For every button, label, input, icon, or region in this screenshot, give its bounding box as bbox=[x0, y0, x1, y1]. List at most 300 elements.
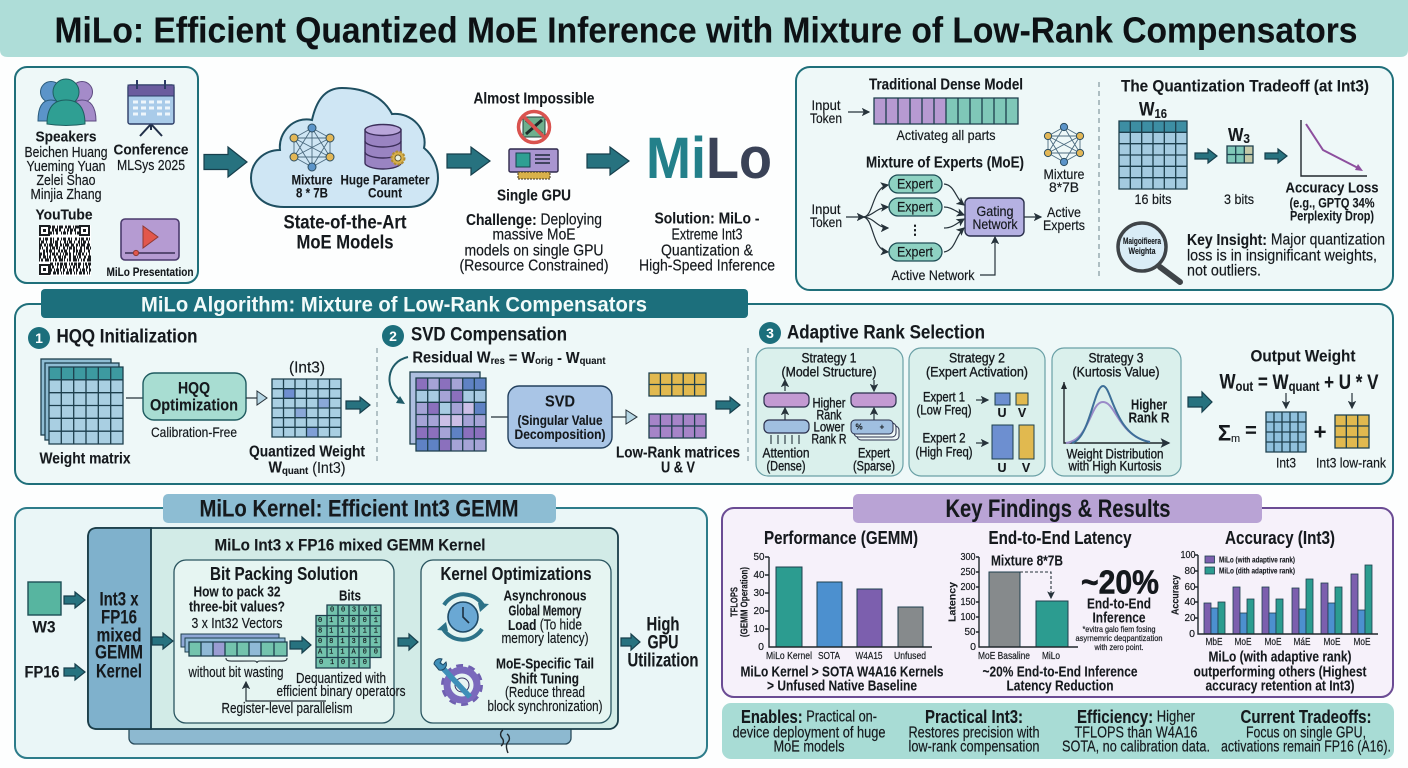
arrow bbox=[1024, 216, 1041, 218]
chart: performance: 0 bbox=[758, 641, 764, 653]
arrow bbox=[587, 147, 629, 175]
box: mixed GEMM kernel bbox=[88, 528, 618, 729]
label: quantized weight: W bbox=[268, 460, 283, 476]
formula: sum: = bbox=[1245, 420, 1257, 442]
text: cloud labels: Mixture bbox=[292, 172, 333, 188]
label: high GPU utilization: Utilization bbox=[628, 650, 698, 672]
grid: U bbox=[649, 373, 706, 396]
text: speakers: Speakers bbox=[36, 128, 96, 146]
arrow bbox=[398, 634, 418, 650]
takeaway: efficiency: SOTA, no calibration data. bbox=[1062, 738, 1210, 756]
input: W3 bbox=[28, 582, 61, 636]
formula: residual: Residual W bbox=[412, 350, 499, 366]
bit grid: A 1 1 A 0 0 bbox=[318, 648, 378, 656]
grid: low-rank bbox=[1335, 415, 1369, 448]
text: key insight: not outliers. bbox=[1187, 262, 1261, 280]
formula: sum: m bbox=[1231, 433, 1240, 445]
chart: latency: Mixture 8*7B bbox=[991, 552, 1063, 570]
takeaway: efficiency bbox=[1062, 707, 1210, 756]
card: strategy 1: % bbox=[855, 422, 863, 432]
gating network bbox=[965, 198, 1024, 236]
card: strategy 1: Rank R bbox=[812, 432, 847, 446]
box: kernel optimizations: Asynchronous bbox=[504, 588, 586, 604]
panel: takeaways bbox=[722, 703, 1394, 759]
chart: accuracy bbox=[1170, 528, 1378, 694]
formula: residual: res bbox=[491, 355, 505, 367]
chart: latency: *evitra galo fiem fosing bbox=[1082, 624, 1156, 634]
label: W3: 3 bbox=[1243, 130, 1250, 146]
chart: accuracy: MoE bbox=[1324, 636, 1340, 648]
takeaway: practical int3: Practical Int3: bbox=[925, 707, 1023, 727]
card: strategy 1: + bbox=[880, 422, 885, 432]
chart: latency: ~20% End-to-End Inference bbox=[982, 664, 1138, 680]
expert nodes bbox=[889, 175, 942, 261]
arrow bbox=[152, 633, 173, 649]
box: bit packing: How to pack 32 bbox=[194, 584, 280, 600]
title bbox=[0, 0, 1408, 57]
text: speakers: Beichen Huang bbox=[24, 145, 108, 161]
label: input token: Token bbox=[810, 214, 842, 230]
grid stack: weight matrix bbox=[41, 359, 123, 444]
card: strategy 2: V bbox=[1018, 406, 1027, 420]
card: strategy 1: Expert bbox=[858, 446, 890, 460]
label: input token bbox=[810, 97, 842, 126]
takeaway: tradeoffs bbox=[1221, 707, 1391, 756]
label: mixture bbox=[1044, 166, 1085, 195]
text: state of the art: State-of-the-Art bbox=[284, 212, 407, 234]
card: strategy 2: U bbox=[997, 461, 1007, 475]
expert nodes: Expert bbox=[897, 176, 933, 192]
chart: accuracy: 40 bbox=[1184, 596, 1196, 608]
icon: mixture network bbox=[1044, 123, 1084, 166]
text: speakers: Zelei Shao bbox=[36, 173, 96, 189]
bit grid: 0 8 1 3 8 1 bbox=[318, 638, 378, 646]
chart: performance: MiLo Kernel bbox=[766, 650, 812, 662]
label: low-rank matrices bbox=[616, 444, 740, 476]
takeaway: efficiency: TFLOPS than W4A16 bbox=[1074, 724, 1198, 742]
formula: residual: orig bbox=[535, 355, 553, 367]
text: key insight: Key Insight: Major quantization bbox=[1187, 232, 1385, 248]
text: state of the art: MoE Models bbox=[296, 232, 394, 254]
text: cloud labels bbox=[292, 172, 430, 200]
label: input token: Input bbox=[812, 201, 841, 217]
step 1 heading: 1 bbox=[35, 330, 43, 346]
card: strategy 2: (High Freq) bbox=[916, 444, 972, 460]
chart: accuracy: MáE bbox=[1294, 636, 1310, 648]
box: HQQ optimization: Optimization bbox=[150, 396, 238, 414]
chart: latency: MoE Basaline bbox=[978, 650, 1030, 662]
label: mixture: 8*7B bbox=[1049, 179, 1079, 195]
label: high GPU utilization: GPU bbox=[648, 632, 678, 654]
takeaway: efficiency: Efficiency: Higher bbox=[1077, 707, 1195, 727]
chart: accuracy: Accuracy (Int3) bbox=[1225, 528, 1335, 548]
label: 3 bits: 3 bits bbox=[1224, 191, 1254, 207]
chart: performance: 40 bbox=[754, 569, 765, 581]
label: quantized weight bbox=[249, 444, 365, 477]
box: kernel optimizations: Global Memory bbox=[508, 602, 582, 620]
text: state of the art bbox=[284, 212, 407, 254]
heading bar: algorithm bbox=[41, 289, 748, 318]
label: active experts: Active bbox=[1047, 204, 1081, 220]
text: challenge: Challenge: Deploying bbox=[466, 212, 602, 228]
chart: latency: 250 bbox=[960, 566, 976, 578]
bit grid: 0 1 3 0 0 1 bbox=[318, 617, 378, 625]
dense bar bbox=[874, 98, 1018, 124]
box: bit packing: Register-level parallelism bbox=[222, 701, 352, 717]
text: key insight: loss is in insignificant weights, bbox=[1187, 248, 1377, 264]
label: accuracy loss: Perplexity Drop) bbox=[1290, 208, 1374, 224]
arrow bbox=[64, 592, 85, 608]
formula: sum bbox=[1218, 420, 1257, 446]
icon: gear and wrench bbox=[434, 659, 479, 702]
bit grid: 0 0 3 0 1 bbox=[330, 606, 378, 614]
label: active experts: Experts bbox=[1043, 217, 1085, 233]
box: HQQ optimization: HQQ bbox=[178, 378, 210, 398]
card: strategy 1 bbox=[756, 348, 903, 476]
heading: traditional dense model: Traditional Dense Model bbox=[869, 76, 1023, 94]
grid: quantized weight bbox=[272, 379, 341, 437]
heading bar: algorithm: MiLo Algorithm: Mixture of Low-Rank Compensators bbox=[141, 294, 647, 316]
label: accuracy loss bbox=[1286, 180, 1378, 224]
card: strategy 2: (Low Freq) bbox=[916, 402, 972, 418]
chart: accuracy: MoE bbox=[1234, 636, 1252, 648]
takeaway: practical int3: Restores precision with bbox=[908, 724, 1040, 742]
chart: accuracy: 80 bbox=[1184, 565, 1196, 577]
chart: performance: Performance (GEMM) bbox=[764, 528, 918, 548]
panel: speakers and conference bbox=[15, 67, 198, 283]
card: strategy 1: Attention bbox=[762, 446, 810, 460]
text: challenge: (Resource Constrained) bbox=[460, 258, 608, 274]
label: high GPU utilization: High bbox=[646, 614, 680, 636]
card: strategy 2: Strategy 2 bbox=[949, 350, 1005, 366]
card: strategy 1: Strategy 1 bbox=[802, 350, 856, 366]
chart: performance: 30 bbox=[754, 587, 765, 599]
card: strategy 1: Higher bbox=[812, 396, 846, 410]
chart: latency: 200 bbox=[960, 581, 976, 593]
formula: output weight: W bbox=[1220, 370, 1239, 394]
box: kernel optimizations: Shift Tuning bbox=[511, 670, 579, 688]
expert nodes: ⋮ bbox=[908, 222, 922, 238]
arrows: token to experts bbox=[846, 185, 888, 252]
text: solution: Quantization & bbox=[661, 242, 754, 260]
heading bar: key findings: Key Findings & Results bbox=[946, 495, 1170, 523]
arrow bbox=[621, 634, 640, 650]
arrow bbox=[1195, 149, 1217, 163]
formula: residual: = W bbox=[505, 350, 536, 366]
chart: accuracy: outperforming others (Highest bbox=[1194, 664, 1366, 680]
chart: accuracy: 0 bbox=[1189, 628, 1195, 640]
text: conference: Conference bbox=[114, 142, 188, 158]
box: kernel optimizations: MoE-Specific Tail bbox=[496, 656, 594, 672]
label: int3: (Int3) bbox=[289, 360, 325, 376]
takeaway: enables bbox=[732, 707, 886, 756]
text: solution: High-Speed Inference bbox=[639, 258, 775, 274]
label: 16 bits: 16 bits bbox=[1134, 191, 1172, 207]
arrow bbox=[346, 397, 370, 413]
box: bit packing: three-bit values? bbox=[189, 598, 285, 616]
panel: key findings bbox=[722, 494, 1393, 697]
label: activate all parts: Activateg all parts bbox=[896, 127, 996, 143]
text: cloud labels: 8 * 7B bbox=[296, 186, 328, 200]
arrow bbox=[204, 147, 247, 177]
card: strategy 2: Expert 2 bbox=[922, 430, 966, 446]
label: kernel side bbox=[95, 590, 143, 682]
heading: mixture of experts: Mixture of Experts (MoE) bbox=[866, 154, 1024, 172]
card: strategy 2: U bbox=[997, 406, 1007, 420]
chart: accuracy: accuracy retention at Int3) bbox=[1206, 678, 1354, 694]
arrow bbox=[716, 397, 740, 413]
text: challenge: massive MoE bbox=[492, 226, 576, 244]
card: strategy 2: (Expert Activation) bbox=[926, 364, 1028, 380]
label: accuracy loss: Accuracy Loss bbox=[1286, 180, 1378, 196]
text: challenge: models on single GPU bbox=[464, 242, 604, 260]
arrow bbox=[1265, 149, 1287, 163]
label: W16: 16 bbox=[1154, 106, 1167, 120]
icon: GPU bbox=[509, 149, 558, 179]
label: kernel side: Int3 x bbox=[100, 590, 139, 610]
chart: latency: 0 bbox=[970, 641, 976, 653]
bit grid bbox=[316, 605, 381, 668]
box: bit packing: efficient binary operators bbox=[276, 684, 406, 700]
label: int3 grids: Int3 low-rank bbox=[1316, 456, 1386, 470]
logo: MiLo: MiLo bbox=[646, 126, 772, 190]
grid: W16 bbox=[1119, 121, 1187, 189]
chart: latency: End-to-End bbox=[1087, 596, 1151, 612]
step 3 heading: Adaptive Rank Selection bbox=[787, 322, 985, 344]
chart: accuracy loss bbox=[1301, 120, 1367, 176]
step 3 heading: 3 bbox=[766, 325, 774, 341]
formula: residual: quant bbox=[580, 355, 606, 367]
text: single GPU: Single GPU bbox=[497, 188, 571, 204]
panel: MiLo algorithm bbox=[15, 289, 1393, 484]
label: low-rank matrices: U & V bbox=[661, 460, 696, 476]
card: strategy 3 bbox=[1052, 348, 1181, 476]
text: solution bbox=[639, 210, 775, 274]
chart: latency: Latency Reduction bbox=[1006, 678, 1114, 694]
box: kernel optimizations: memory latency) bbox=[502, 631, 588, 647]
label: input token: Input bbox=[812, 97, 841, 113]
text: cloud labels: Huge Parameter bbox=[340, 172, 430, 188]
chart: latency: MiLo bbox=[1042, 650, 1060, 662]
vectors bbox=[181, 634, 287, 663]
formula: output weight: out bbox=[1236, 378, 1253, 394]
label: accuracy loss: (e.g., GPTQ 34% bbox=[1290, 196, 1374, 210]
chart: accuracy: 60 bbox=[1184, 581, 1196, 593]
box: bit packing: Bits bbox=[339, 588, 361, 604]
formula: output weight: = W bbox=[1253, 370, 1289, 394]
icon: conference calendar bbox=[128, 80, 174, 136]
icon: database with gear bbox=[365, 124, 404, 169]
formula: output weight: + U * V bbox=[1319, 370, 1378, 394]
chart: accuracy: MbE bbox=[1206, 636, 1222, 648]
box: kernel optimizations: (Reduce thread bbox=[505, 685, 585, 701]
legend: accuracy bbox=[1205, 554, 1295, 576]
chart: accuracy: 100 bbox=[1180, 549, 1196, 561]
heading bar: key findings bbox=[853, 494, 1262, 523]
card: strategy 3: Strategy 3 bbox=[1088, 350, 1144, 366]
icon: people bbox=[38, 79, 96, 126]
formula: residual: - W bbox=[553, 350, 580, 366]
label: W3: W bbox=[1228, 125, 1245, 145]
label: input token bbox=[810, 201, 842, 230]
chart: latency: with zero point. bbox=[1094, 642, 1144, 652]
text: speakers: Minjia Zhang bbox=[30, 187, 102, 203]
chart: performance: 50 bbox=[754, 551, 765, 563]
box: bit packing: Bit Packing Solution bbox=[210, 564, 358, 584]
label: quantized weight: (Int3) bbox=[308, 460, 346, 476]
text: solution: Extreme Int3 bbox=[672, 226, 742, 244]
label: W16: W bbox=[1139, 100, 1157, 120]
symbol: plus: + bbox=[1314, 420, 1326, 444]
card: strategy 3: Weight Distribution bbox=[1066, 446, 1164, 462]
chart: accuracy: Accuracy bbox=[1170, 575, 1182, 615]
legend: accuracy: MiLo (dith adaptive rank) bbox=[1219, 566, 1295, 576]
label: kernel side: mixed bbox=[96, 626, 142, 646]
card: strategy 1: (Dense) bbox=[766, 458, 806, 474]
icon: magnifier: Maigoifieera bbox=[1123, 236, 1162, 246]
arrows: experts to gating bbox=[944, 184, 964, 252]
text: challenge bbox=[460, 212, 608, 274]
box: bit packing: without bit wasting bbox=[188, 665, 284, 681]
arrow bbox=[848, 111, 869, 113]
box: kernel optimizations: Kernel Optimizations bbox=[440, 564, 592, 584]
box: SVD bbox=[508, 386, 612, 448]
chart: performance: TFLOPS bbox=[730, 587, 740, 617]
card: strategy 3: Rank R bbox=[1128, 410, 1170, 426]
box: bit packing: Dequantized with bbox=[296, 671, 386, 687]
chart: performance bbox=[730, 528, 944, 694]
heading bar: kernel: MiLo Kernel: Efficient Int3 GEMM bbox=[200, 496, 518, 522]
box: kernel optimizations bbox=[421, 560, 611, 723]
icon: MoE cloud bbox=[251, 88, 438, 207]
label: kernel side: Kernel bbox=[96, 662, 142, 682]
input: FP16: FP16 bbox=[24, 662, 60, 682]
chart: latency: 300 bbox=[960, 551, 976, 563]
box: SVD: SVD bbox=[545, 394, 575, 410]
panel: MiLo kernel bbox=[15, 494, 707, 758]
takeaway: enables: Enables: Practical on- bbox=[741, 707, 877, 727]
expert nodes: Expert bbox=[897, 200, 933, 214]
card: strategy 3: Higher bbox=[1131, 396, 1167, 414]
gating network: Network bbox=[972, 216, 1018, 232]
takeaway: practical int3 bbox=[908, 707, 1040, 756]
label: high GPU utilization bbox=[628, 614, 698, 672]
grid: int3 bbox=[1266, 412, 1306, 452]
chart: accuracy: MoE bbox=[1354, 636, 1370, 648]
takeaway: tradeoffs: Current Tradeoffs: bbox=[1240, 707, 1372, 727]
text: almost impossible: Almost Impossible bbox=[474, 90, 595, 108]
text: key insight bbox=[1187, 232, 1385, 280]
box: kernel optimizations: block synchronization) bbox=[488, 699, 602, 715]
card: strategy 3: with High Kurtosis bbox=[1068, 458, 1162, 474]
icon: prohibited bbox=[518, 112, 550, 142]
chart: latency: ~20% bbox=[1081, 564, 1159, 600]
label: kernel side: GEMM bbox=[95, 642, 143, 664]
chart: performance: > Unfused Native Baseline bbox=[767, 678, 917, 694]
box: SVD: (Singular Value bbox=[518, 412, 603, 428]
label: calibration-free: Calibration-Free bbox=[151, 424, 237, 440]
connector bbox=[491, 416, 508, 418]
text: presentation label: MiLo Presentation bbox=[106, 265, 194, 279]
chart: performance: Unfused bbox=[894, 650, 926, 662]
label: active experts bbox=[1043, 204, 1085, 233]
arrows: down to grids bbox=[1286, 393, 1352, 408]
text: youtube: YouTube bbox=[36, 206, 92, 224]
chart: latency: 50 bbox=[964, 626, 976, 638]
heading: quantization tradeoff: The Quantization Tradeoff (at Int3) bbox=[1121, 76, 1369, 96]
icon: video player bbox=[121, 219, 179, 260]
gating network: Gating bbox=[976, 203, 1014, 219]
formula: output weight: quant bbox=[1289, 378, 1320, 394]
arrow bbox=[980, 237, 995, 275]
chart: latency: 100 bbox=[960, 611, 976, 623]
heading: kernel: MiLo Int3 x FP16 mixed GEMM Kernel bbox=[214, 536, 486, 554]
arrow bbox=[64, 664, 85, 680]
takeaway: enables: device deployment of huge bbox=[732, 724, 886, 742]
bars: accuracy bbox=[1204, 565, 1372, 634]
box: SVD: Decomposition) bbox=[514, 426, 606, 442]
box: kernel optimizations: Load (To hide bbox=[508, 616, 582, 634]
icon: bottom connector bbox=[501, 730, 509, 753]
chart: latency: Inference bbox=[1092, 610, 1146, 626]
label: low-rank matrices: Low-Rank matrices bbox=[616, 444, 740, 462]
text: cloud labels: Count bbox=[368, 186, 402, 200]
step 2 heading: SVD Compensation bbox=[411, 324, 567, 346]
label: quantized weight: quant bbox=[282, 465, 309, 477]
chart: performance: W4A15 bbox=[856, 650, 883, 662]
chart: accuracy: MoE bbox=[1264, 636, 1282, 648]
formula: sum: Σ bbox=[1218, 420, 1231, 446]
base bar bbox=[129, 722, 571, 744]
chart: accuracy: MiLo (with adaptive rank) bbox=[1208, 648, 1352, 666]
heading: output weight: Output Weight bbox=[1250, 346, 1356, 366]
box: bit packing: 3 x Int32 Vectors bbox=[192, 616, 282, 632]
box: HQQ optimization bbox=[143, 373, 246, 420]
card: strategy 2 bbox=[909, 348, 1045, 476]
grid: W3 bbox=[1227, 146, 1253, 163]
arrow bbox=[612, 410, 637, 424]
text: speakers bbox=[24, 128, 108, 203]
card: strategy 1: (Sparse) bbox=[853, 458, 895, 474]
chart: performance: SOTA bbox=[818, 650, 840, 662]
takeaway: enables: MoE models bbox=[774, 738, 845, 756]
label: int3 grids: Int3 bbox=[1276, 456, 1296, 470]
panel: models and quantization tradeoff bbox=[796, 67, 1393, 290]
icon: network bbox=[290, 124, 334, 171]
chart: latency bbox=[948, 528, 1163, 694]
icon: magnifier: Weighta bbox=[1128, 246, 1156, 256]
icon: magnifier bbox=[1118, 223, 1180, 282]
chart: performance: MiLo Kernel > SOTA W4A16 Kernels bbox=[740, 664, 944, 680]
connector bbox=[126, 397, 143, 399]
step 2 heading: 2 bbox=[389, 328, 397, 344]
icon: clock bbox=[437, 594, 489, 640]
chart: performance: 20 bbox=[754, 605, 765, 617]
chart: accuracy: 20 bbox=[1184, 612, 1196, 624]
expert nodes: Expert bbox=[897, 244, 933, 260]
text: conference: MLSys 2025 bbox=[117, 158, 185, 174]
card: strategy 1: (Model Structure) bbox=[782, 364, 876, 380]
label: weight matrix: Weight matrix bbox=[40, 450, 131, 468]
chart: latency: 150 bbox=[960, 596, 976, 608]
grid: V bbox=[649, 414, 706, 438]
bit grid: 0 1 0 1 0 bbox=[319, 659, 367, 667]
takeaway: tradeoffs: Focus on single GPU, bbox=[1246, 724, 1366, 742]
text: solution: Solution: MiLo - bbox=[654, 210, 760, 228]
arrow bbox=[1188, 392, 1212, 412]
box: bit packing bbox=[174, 560, 406, 723]
legend: accuracy: MiLo (with adaptive rank) bbox=[1219, 554, 1295, 564]
